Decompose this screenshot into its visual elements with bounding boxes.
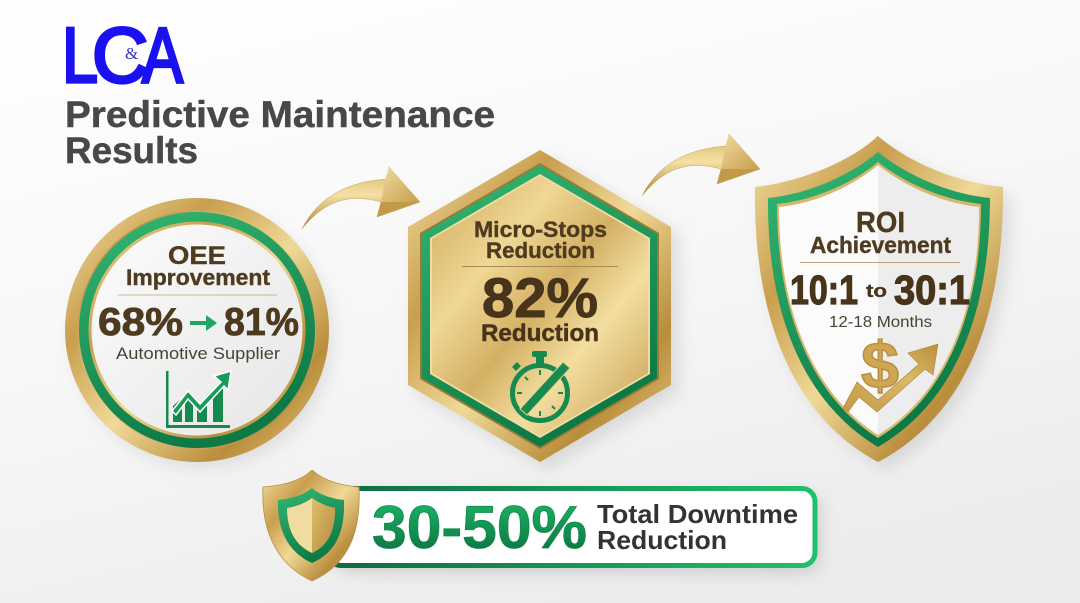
logo: LC&A: & — [125, 44, 138, 63]
metric: 30-50%: 30-50% — [372, 494, 587, 561]
panel: micro-stops reduction badge — [408, 150, 679, 470]
logo: LC&A: L — [62, 11, 98, 99]
label: total downtime reduction: Total Downtime — [597, 499, 798, 529]
icon: small gold shield — [263, 470, 359, 581]
icon: growth chart — [166, 371, 231, 428]
icon: dollar with rising arrow — [843, 328, 938, 412]
arrow: OEE to micro-stops — [302, 167, 420, 229]
title: Predictive Maintenance — [65, 94, 495, 135]
logo: LC&A: A — [142, 11, 183, 99]
metric: 10:1 to 30:1: to — [866, 281, 887, 301]
heading: ROI achievement: Achievement — [810, 232, 951, 258]
logo: LC&A — [62, 11, 183, 99]
metric: 68% to 81%: 81% — [224, 301, 299, 344]
callout: total downtime reduction — [263, 470, 820, 581]
metric: 82% reduction: 82% — [482, 266, 598, 329]
logo: LC&A: C — [92, 11, 148, 99]
arrow: micro-stops to ROI — [642, 134, 760, 196]
label: total downtime reduction: Reduction — [597, 525, 727, 555]
icon: dollar with rising arrow: $ — [861, 328, 899, 402]
heading: OEE improvement: Improvement — [126, 265, 271, 290]
label: 12-18 months: 12-18 Months — [829, 314, 932, 331]
heading: OEE improvement: OEE — [168, 242, 226, 270]
metric: 10:1 to 30:1: 10:1 — [790, 267, 858, 313]
heading: ROI achievement — [810, 207, 951, 258]
panel: OEE improvement badge — [65, 198, 333, 468]
heading: micro-stops reduction — [474, 217, 607, 263]
heading: micro-stops reduction: Reduction — [486, 238, 595, 263]
metric: 10:1 to 30:1 — [790, 267, 970, 313]
label: automotive supplier: Automotive Supplier — [116, 344, 280, 363]
metric: 68% to 81%: 68% — [98, 301, 183, 344]
heading: OEE improvement — [126, 242, 271, 290]
metric: 68% to 81% — [98, 301, 299, 344]
panel: ROI achievement shield — [755, 136, 1011, 470]
metric: 10:1 to 30:1: 30:1 — [894, 267, 970, 313]
metric: 82% reduction: Reduction — [481, 320, 599, 347]
title — [65, 94, 495, 171]
title: Results — [65, 130, 198, 171]
panel: callout bar — [328, 488, 815, 566]
heading: ROI achievement: ROI — [856, 207, 905, 239]
label: total downtime reduction — [597, 499, 798, 555]
icon: crossed-out stopwatch — [512, 351, 570, 420]
heading: micro-stops reduction: Micro-Stops — [474, 217, 607, 242]
